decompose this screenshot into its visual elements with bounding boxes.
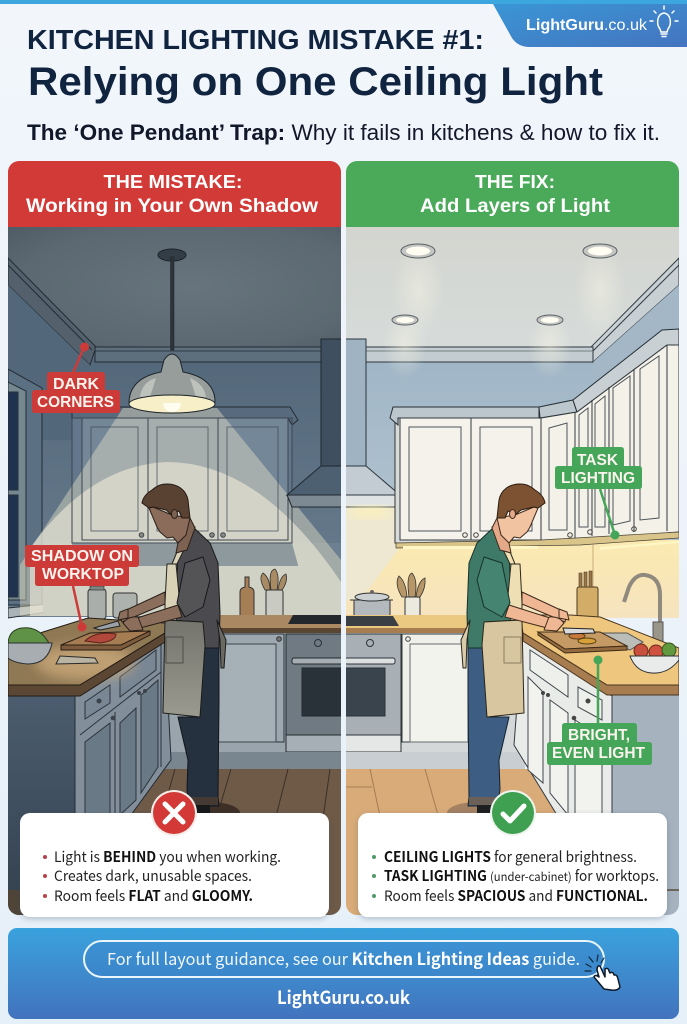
card: fix bullets bbox=[358, 790, 667, 917]
logo tab bbox=[493, 4, 687, 47]
fruit bowl bbox=[630, 643, 679, 673]
card: mistake bullets: Light is BEHIND you when working. bbox=[54, 846, 281, 867]
panel heading: the fix: THE FIX: bbox=[475, 172, 555, 192]
counter items bbox=[88, 569, 286, 619]
callout: shadow on worktop bbox=[25, 545, 139, 632]
card: mistake bullets: Creates dark, unusable spaces. bbox=[54, 865, 252, 886]
callout: dark corners bbox=[32, 342, 120, 413]
callout: bright, even light: BRIGHT, bbox=[568, 727, 630, 744]
cabinet door outlines bbox=[72, 418, 292, 543]
upper cabinets bbox=[390, 329, 679, 548]
footer banner: LightGuru.co.uk bbox=[277, 984, 410, 1010]
card: mistake bullets bbox=[20, 790, 329, 917]
panel heading: the mistake: THE MISTAKE: bbox=[104, 172, 242, 192]
panel: the fix bbox=[344, 160, 683, 925]
range hood bbox=[287, 339, 343, 507]
worktop bbox=[520, 615, 679, 695]
callout: bright, even light: EVEN LIGHT bbox=[552, 745, 646, 762]
upper cabinets bbox=[72, 406, 298, 517]
wall, dark bbox=[8, 347, 341, 617]
person: cooking in shadow bbox=[118, 484, 226, 814]
faucet bbox=[624, 575, 663, 642]
window bbox=[8, 369, 47, 618]
floor bbox=[130, 769, 345, 919]
worktop bbox=[8, 618, 165, 696]
icon: click hand bbox=[585, 955, 620, 990]
subtitle: The ‘One Pendant’ Trap: Why it fails in kitchens & how to fix it. bbox=[27, 120, 660, 145]
button: kitchen lighting ideas link bbox=[84, 941, 604, 977]
range hood bbox=[346, 338, 394, 520]
icon: green tick bbox=[490, 790, 536, 836]
folded cloth bbox=[56, 656, 98, 664]
peninsula cabinets bbox=[8, 641, 171, 925]
floor bbox=[345, 769, 560, 919]
lower wall tone bbox=[43, 543, 341, 617]
card: fix bullets: TASK LIGHTING (under-cabinet) for worktops. bbox=[384, 865, 659, 886]
callout: dark corners: DARK bbox=[53, 376, 100, 393]
title: KITCHEN LIGHTING MISTAKE #1: bbox=[27, 24, 484, 55]
panel: the mistake bbox=[8, 160, 345, 925]
cutting board with food bbox=[61, 621, 150, 650]
cutting board with food bbox=[538, 628, 627, 653]
icon: light bulb bbox=[650, 6, 678, 36]
pendant lamp bbox=[129, 249, 215, 413]
back worktop and cooktop bbox=[220, 615, 341, 633]
shadow under cabinets bbox=[72, 543, 298, 566]
counter items bbox=[350, 571, 598, 620]
card: fix bullets: Room feels SPACIOUS and FUNCTIONAL. bbox=[384, 885, 648, 906]
footer banner bbox=[8, 928, 679, 1019]
wall, bright bbox=[366, 362, 679, 540]
callout: shadow on worktop: SHADOW ON bbox=[31, 548, 133, 565]
card: fix bullets: CEILING LIGHTS for general brightness. bbox=[384, 846, 637, 867]
panel heading: the fix bbox=[346, 160, 679, 227]
light cone bbox=[20, 408, 341, 616]
button: kitchen lighting ideas link: For full layout guidance, see our Kitchen Lighting Ideas guide. bbox=[107, 946, 580, 970]
title: Relying on One Ceiling Light bbox=[28, 60, 603, 104]
person: cooking with task light bbox=[461, 484, 569, 814]
callout: dark corners: CORNERS bbox=[37, 394, 114, 411]
callout: task lighting bbox=[555, 447, 642, 540]
salad bowl bbox=[8, 628, 52, 664]
peninsula cabinets bbox=[514, 640, 683, 925]
ceiling, bright bbox=[346, 226, 679, 347]
base units bbox=[165, 633, 345, 769]
callout: task lighting: TASK bbox=[577, 452, 619, 469]
back worktop and cooktop bbox=[346, 615, 467, 633]
callout: bright, even light bbox=[547, 656, 652, 765]
glowing backsplash bbox=[346, 540, 679, 618]
task lighting strips bbox=[403, 541, 679, 586]
downlights bbox=[385, 244, 618, 371]
title bbox=[27, 24, 603, 104]
panel heading: the mistake bbox=[8, 160, 341, 227]
card: mistake bullets: Room feels FLAT and GLOOMY. bbox=[54, 885, 253, 906]
panel heading: the fix: Add Layers of Light bbox=[420, 196, 611, 217]
ceiling, dark bbox=[8, 226, 341, 347]
callout: shadow on worktop: WORKTOP bbox=[42, 566, 124, 583]
panel heading: the mistake: Working in Your Own Shadow bbox=[26, 196, 318, 217]
logo tab: LightGuru.co.uk bbox=[526, 17, 648, 34]
callout: task lighting: LIGHTING bbox=[561, 470, 635, 487]
icon: red cross bbox=[151, 790, 197, 836]
base units bbox=[345, 633, 525, 769]
